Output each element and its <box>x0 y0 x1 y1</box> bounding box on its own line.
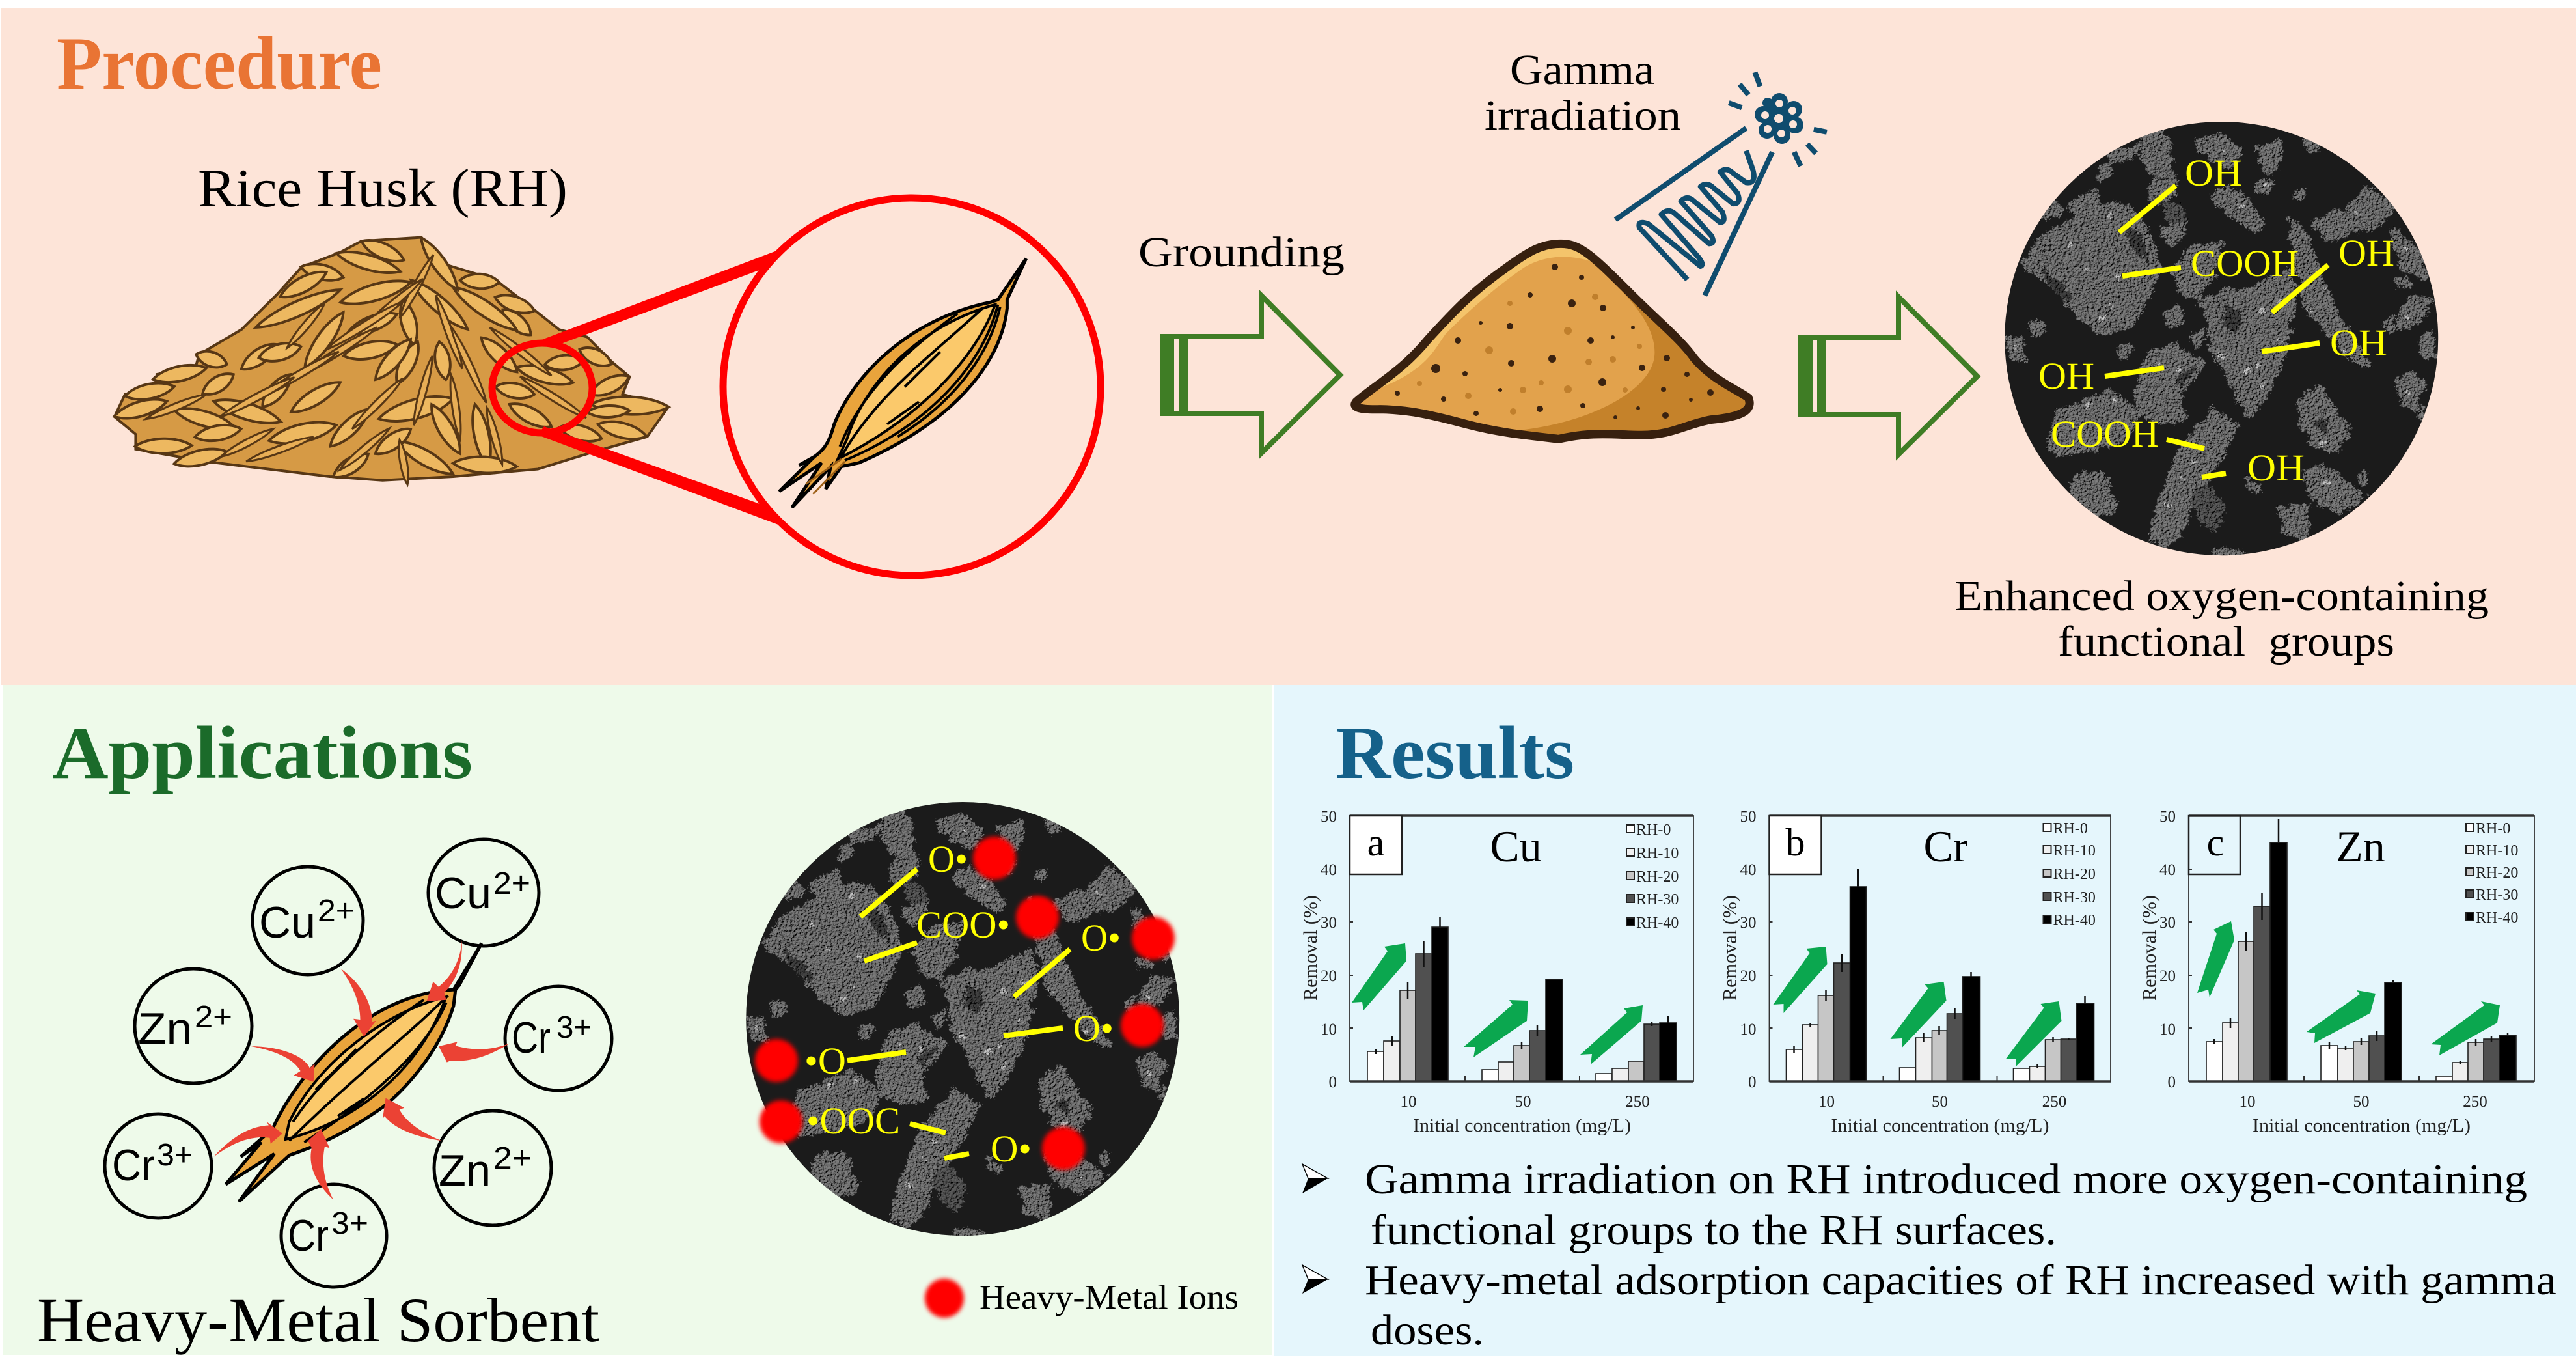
bar chart: Cr removal: 0 <box>1748 1074 1756 1091</box>
text block: key findings: Gamma irradiation on RH introduced more oxygen-containing <box>1365 1156 2527 1203</box>
image: SEM micrograph with functional groups: OH <box>2330 322 2387 364</box>
bar chart: Cu removal: 30 <box>1321 914 1337 932</box>
callout: small magnifier ring <box>492 343 592 433</box>
bar chart: Cr removal: RH-10 <box>2053 842 2096 859</box>
image: SEM micrograph with bound metal ions: O• <box>991 1128 1032 1170</box>
bar chart: Cu removal: 10 <box>1401 1093 1416 1111</box>
diagram: metal ions around rice husk: Zn <box>439 1146 491 1195</box>
image: SEM micrograph with bound metal ions <box>746 802 1179 1237</box>
bar chart: Cr removal: 30 <box>1740 914 1756 932</box>
bar chart: Zn removal <box>2139 808 2534 1136</box>
bar chart: Zn removal: Initial concentration (mg/L) <box>2253 1116 2471 1136</box>
image: SEM micrograph with bound metal ions: O• <box>1081 917 1121 959</box>
image: SEM micrograph with functional groups: COOH <box>2051 413 2159 455</box>
panel: procedure background <box>1 8 2576 685</box>
diagram: metal ions around rice husk: Zn <box>138 1004 192 1053</box>
text block: key findings: Heavy-metal adsorption capacities of RH increased with gamma <box>1365 1257 2556 1304</box>
bar chart: Zn removal: c <box>2207 821 2224 864</box>
bar chart: Cr removal: 10 <box>1740 1021 1756 1038</box>
image: SEM micrograph with bound metal ions: O• <box>928 838 968 880</box>
bar chart: Zn removal: RH-10 <box>2476 842 2518 859</box>
image: SEM micrograph with functional groups: OH <box>2338 232 2394 274</box>
bar chart: Cu removal: Initial concentration (mg/L) <box>1413 1116 1631 1136</box>
bar chart: Cr removal <box>1720 808 2111 1136</box>
bar chart: Zn removal: Removal (%) <box>2139 895 2160 1001</box>
bar chart: Cr removal: 20 <box>1740 967 1756 985</box>
bar chart: Zn removal: 20 <box>2159 967 2176 985</box>
icon: rice husk pile <box>113 234 669 485</box>
icon: ground powder pile <box>1355 243 1749 439</box>
bar chart: Zn removal: RH-30 <box>2476 887 2518 904</box>
icon: gamma source with beam <box>1615 72 1827 296</box>
bar chart: Cu removal: 10 <box>1321 1021 1337 1038</box>
diagram: metal ions around rice husk: Cr <box>288 1211 329 1260</box>
heading: Results: Results <box>1336 712 1574 795</box>
text: enhanced functional groups caption <box>1954 572 2489 665</box>
diagram: metal ions around rice husk: 2+ <box>493 1141 532 1176</box>
bar chart: Cu removal: RH-10 <box>1636 845 1679 862</box>
bar chart: Cu removal: RH-40 <box>1636 915 1679 932</box>
image: SEM micrograph with bound metal ions: O• <box>1073 1007 1114 1049</box>
bar chart: Zn removal: 250 <box>2463 1093 2487 1111</box>
bar chart: Cu removal: 20 <box>1321 967 1337 985</box>
bar chart: Cu removal: RH-0 <box>1636 822 1671 839</box>
bar chart: Cu removal: 50 <box>1515 1093 1531 1111</box>
bar chart: Cr removal: Removal (%) <box>1720 895 1740 1001</box>
callout: magnifier lines <box>538 246 789 529</box>
bar chart: Cu removal: 0 <box>1329 1074 1337 1091</box>
bar chart: Cu removal <box>1300 808 1693 1136</box>
bar chart: Cu removal: Cu <box>1490 822 1542 871</box>
callout: large magnifier circle <box>723 198 1101 576</box>
panel: results background <box>1274 685 2576 1356</box>
image: SEM micrograph with functional groups: OH <box>2038 355 2094 397</box>
label: Rice Husk (RH): Rice Husk (RH) <box>198 158 568 219</box>
image: SEM micrograph with bound metal ions: •O <box>804 1040 846 1082</box>
bar chart: Zn removal: RH-0 <box>2476 820 2510 837</box>
diagram: metal ions around rice husk <box>105 839 612 1287</box>
label: Gamma irradiation: irradiation <box>1485 92 1681 139</box>
bar chart: Cu removal: RH-30 <box>1636 891 1679 908</box>
diagram: metal ions around rice husk: Cr <box>512 1013 551 1063</box>
bar chart: Zn removal: 50 <box>2159 808 2176 826</box>
bar chart: Cr removal: 40 <box>1740 861 1756 879</box>
bar chart: Cr removal: 50 <box>1932 1093 1948 1111</box>
bar chart: Zn removal: 40 <box>2159 861 2176 879</box>
bar chart: Cu removal: Removal (%) <box>1300 895 1321 1001</box>
diagram: metal ions around rice husk: Cr <box>112 1141 155 1190</box>
bar chart: Cr removal: RH-0 <box>2053 820 2088 837</box>
icon: single rice husk magnified <box>779 258 1026 508</box>
bar chart: Cr removal: RH-40 <box>2053 912 2096 929</box>
text block: key findings: doses. <box>1371 1307 1484 1354</box>
bar chart: Cr removal: Cr <box>1924 822 1968 871</box>
bar chart: Zn removal: RH-40 <box>2476 910 2518 926</box>
bar chart: Zn removal: RH-20 <box>2476 865 2518 882</box>
bar chart: Cr removal: RH-30 <box>2053 889 2096 906</box>
bar chart: Cr removal: RH-20 <box>2053 866 2096 883</box>
label: Gamma irradiation <box>1485 46 1681 139</box>
diagram: metal ions around rice husk: 2+ <box>493 867 530 901</box>
diagram: metal ions around rice husk: 3+ <box>157 1138 193 1173</box>
image: SEM micrograph with functional groups: OH <box>2185 152 2242 194</box>
bar chart: Cr removal: 10 <box>1818 1093 1835 1111</box>
diagram: metal ions around rice husk: Cu <box>259 898 316 947</box>
text block: key findings: functional groups to the RH surfaces. <box>1371 1206 2057 1254</box>
bar chart: Cr removal: 50 <box>1740 808 1756 826</box>
label: Heavy-Metal Sorbent: Heavy-Metal Sorbent <box>37 1285 599 1355</box>
bar chart: Cr removal: 250 <box>2042 1093 2066 1111</box>
bar chart: Cu removal: a <box>1367 821 1384 864</box>
diagram: metal ions around rice husk: Cu <box>435 869 491 918</box>
bar chart: Zn removal: 30 <box>2159 914 2176 932</box>
diagram: metal ions around rice husk: 2+ <box>318 894 355 928</box>
diagram: metal ions around rice husk: 3+ <box>331 1206 368 1241</box>
bar chart: Cu removal: 250 <box>1625 1093 1650 1111</box>
text: enhanced functional groups caption: functional groups <box>2058 618 2394 665</box>
image: SEM micrograph with functional groups: OH <box>2247 447 2305 489</box>
bar chart: Cr removal: Initial concentration (mg/L) <box>1831 1116 2049 1136</box>
arrow: irradiation step <box>1801 297 1977 454</box>
panel: applications background <box>3 685 1272 1355</box>
bar chart: Zn removal: 50 <box>2353 1093 2369 1111</box>
diagram: metal ions around rice husk: 3+ <box>556 1010 592 1045</box>
bar chart: Cu removal: RH-20 <box>1636 869 1679 885</box>
diagram: metal ions around rice husk: 2+ <box>195 1000 232 1035</box>
image: SEM micrograph with bound metal ions: COO• <box>916 904 1010 946</box>
image: SEM micrograph with functional groups <box>2005 122 2438 557</box>
label: Gamma irradiation: Gamma <box>1510 46 1654 94</box>
bar chart: Zn removal: Zn <box>2336 822 2385 871</box>
bar chart: Cu removal: 40 <box>1321 861 1337 879</box>
arrow: grounding step <box>1162 296 1340 453</box>
image: SEM micrograph with functional groups: COOH <box>2191 242 2299 285</box>
image: SEM micrograph with bound metal ions: •OOC <box>806 1100 900 1142</box>
heading: Procedure: Procedure <box>57 22 382 105</box>
label: Grounding: Grounding <box>1138 229 1345 276</box>
bar chart: Zn removal: 0 <box>2167 1074 2176 1091</box>
bar chart: Zn removal: 10 <box>2239 1093 2256 1111</box>
bar chart: Cu removal: 50 <box>1321 808 1337 826</box>
bar chart: Cr removal: b <box>1786 821 1805 864</box>
bar chart: Zn removal: 10 <box>2159 1021 2176 1038</box>
legend: heavy-metal ions: Heavy-Metal Ions <box>980 1279 1239 1316</box>
heading: Applications: Applications <box>52 712 473 795</box>
text block: key findings <box>1302 1156 2556 1354</box>
text: enhanced functional groups caption: Enhanced oxygen-containing <box>1954 572 2489 620</box>
